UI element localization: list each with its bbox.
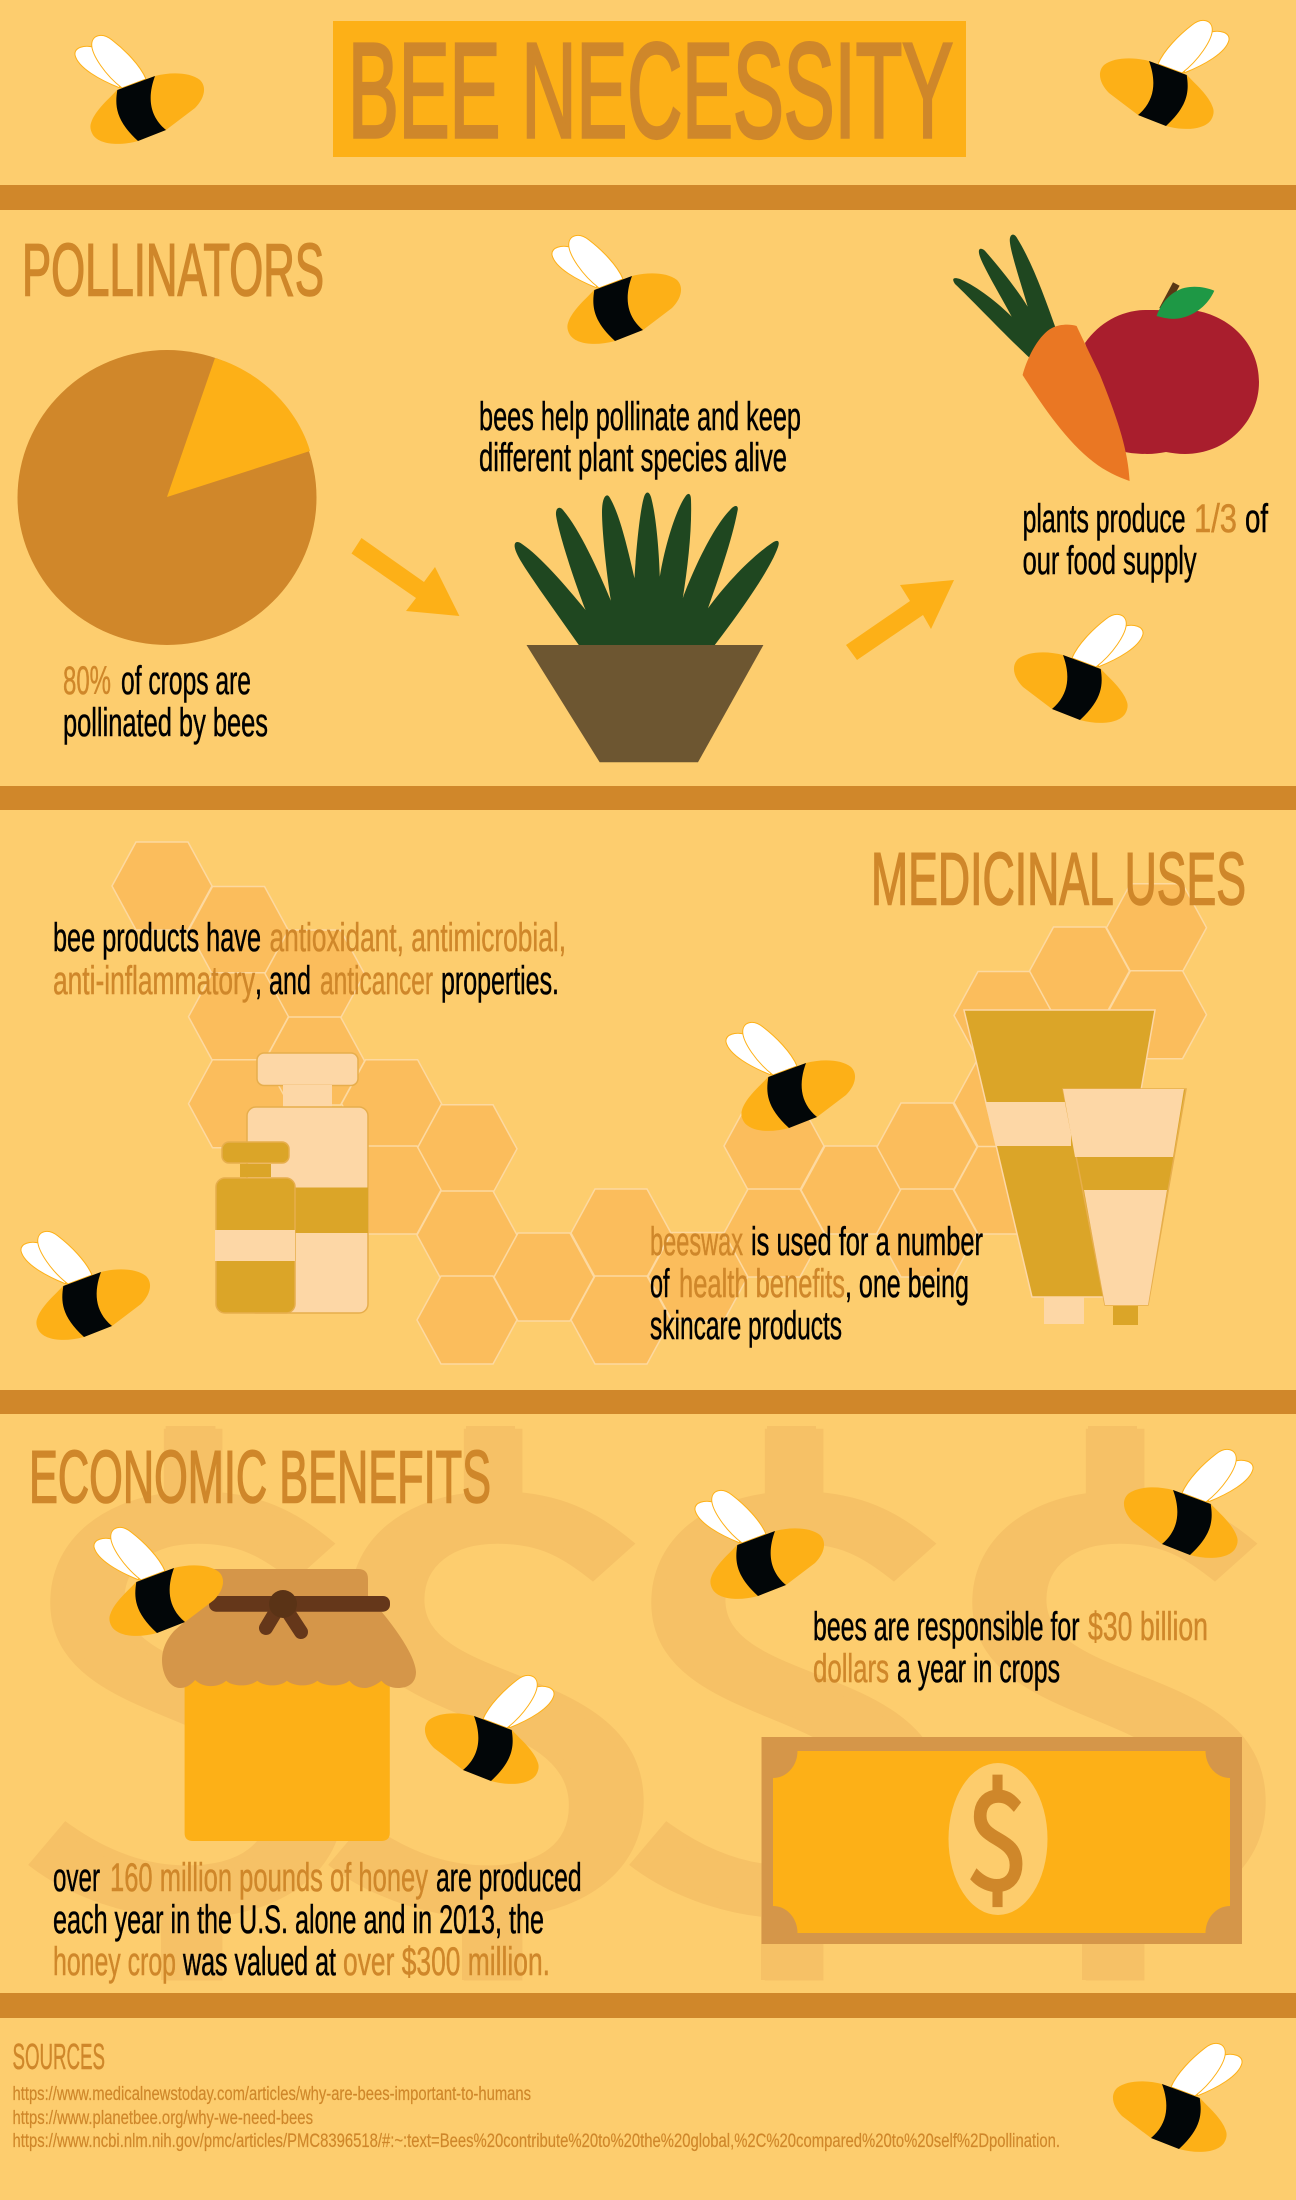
arrow: pie to plant (352, 538, 459, 616)
background dollar signs (0, 1252, 1296, 2069)
text: source links (12, 2084, 1060, 2152)
text: plants produce one third (1023, 497, 1269, 583)
text: bees help pollinate: different plant species alive (479, 436, 787, 480)
text: beeswax: of (650, 1262, 670, 1306)
icon: dollar bill: $ (965, 1734, 1029, 1929)
text: 80 percent of crops (63, 659, 268, 745)
icon: bee top left (75, 35, 204, 144)
panel: pollinators (18, 228, 1269, 762)
text: honey production: was valued at (182, 1940, 336, 1984)
title banner (333, 15, 966, 166)
arrow: plant to food (846, 580, 954, 660)
text: beeswax: skincare products (650, 1304, 842, 1348)
icon: bee right of jar (425, 1675, 554, 1784)
text: beeswax: is used for a number (751, 1220, 983, 1264)
text: beeswax: health benefits (679, 1262, 845, 1306)
background dollar signs: $ (296, 1252, 684, 2069)
text: bee products properties: anticancer (320, 959, 433, 1003)
text: plants produce one third: plants produce (1023, 497, 1186, 541)
text: bee products properties (53, 916, 566, 1003)
text: source links: https://www.planetbee.org/why-we-need-bees (12, 2108, 313, 2129)
text: bee products properties: antioxidant, antimicrobial, (270, 916, 566, 960)
text: thirty billion (813, 1605, 1208, 1691)
text: plants produce one third: our food supply (1023, 539, 1197, 583)
icon: bee top right economic (1124, 1449, 1253, 1558)
text: bee products properties: properties. (441, 959, 559, 1003)
text: honey production (53, 1856, 582, 1984)
text: honey production: are produced (436, 1856, 582, 1900)
text: 80 percent of crops: 80% (63, 659, 111, 703)
text: 80 percent of crops: of crops are (121, 659, 251, 703)
text: plants produce one third: 1/3 (1194, 497, 1237, 541)
heading: economic benefits: ECONOMIC BENEFITS (29, 1436, 491, 1518)
text: beeswax: , one being (845, 1262, 969, 1306)
icon: honey jar (162, 1569, 416, 1841)
text: honey production: over $300 million. (343, 1940, 550, 1984)
text: bees help pollinate (479, 395, 801, 480)
icon: potted plant (515, 492, 779, 762)
icon: bottles (215, 1053, 368, 1313)
icon: bee center right (695, 1490, 824, 1599)
text: bee products properties: , and (255, 959, 311, 1003)
honeycomb background (112, 842, 1206, 1364)
panel: medicinal uses (21, 838, 1246, 1364)
text: thirty billion: a year in crops (897, 1647, 1060, 1691)
icon: skincare tubes (964, 1010, 1186, 1325)
text: plants produce one third: of (1245, 497, 1269, 541)
background dollar signs: $ (597, 1252, 985, 2069)
icon: bee above plant (552, 235, 681, 344)
text: bee products properties: bee products have (53, 916, 261, 960)
text: honey production: 160 million pounds of honey (110, 1856, 428, 1900)
text: thirty billion: dollars (813, 1647, 889, 1691)
heading: pollinators: POLLINATORS (22, 228, 324, 312)
text: beeswax: beeswax (650, 1220, 743, 1264)
background dollar signs: $ (918, 1252, 1296, 2069)
icon: apple and carrot (953, 235, 1259, 481)
icon: bee lower right (1014, 614, 1143, 723)
icon: bee on jar (94, 1527, 223, 1636)
pie chart: 80 percent (18, 350, 316, 645)
text: honey production: each year in the U.S. alone and in 2013, the (53, 1898, 544, 1942)
text: honey production: over (53, 1856, 100, 1900)
text: honey production: honey crop (53, 1940, 176, 1984)
icon: bee medicinal left (21, 1231, 150, 1340)
background dollar signs: $ (0, 1252, 384, 2069)
panel: economic benefits (28, 1426, 1266, 1984)
text: thirty billion: $30 billion (1088, 1605, 1208, 1649)
text: thirty billion: bees are responsible for (813, 1605, 1080, 1649)
text: beeswax (650, 1220, 983, 1348)
panel: sources (12, 2036, 1242, 2152)
text: bees help pollinate: bees help pollinate and keep (479, 395, 801, 439)
heading: sources: SOURCES (12, 2036, 105, 2077)
text: bee products properties: anti-inflammatory (53, 959, 255, 1003)
text: source links: https://www.medicalnewstoday.com/articles/why-are-bees-important-to-humans (12, 2084, 531, 2105)
icon: dollar bill (762, 1737, 1242, 1944)
icon: bee bottom right (1113, 2043, 1242, 2152)
icon: bee medicinal center (726, 1022, 855, 1131)
text: 80 percent of crops: pollinated by bees (63, 701, 268, 745)
icon: bee top right (1100, 20, 1229, 129)
